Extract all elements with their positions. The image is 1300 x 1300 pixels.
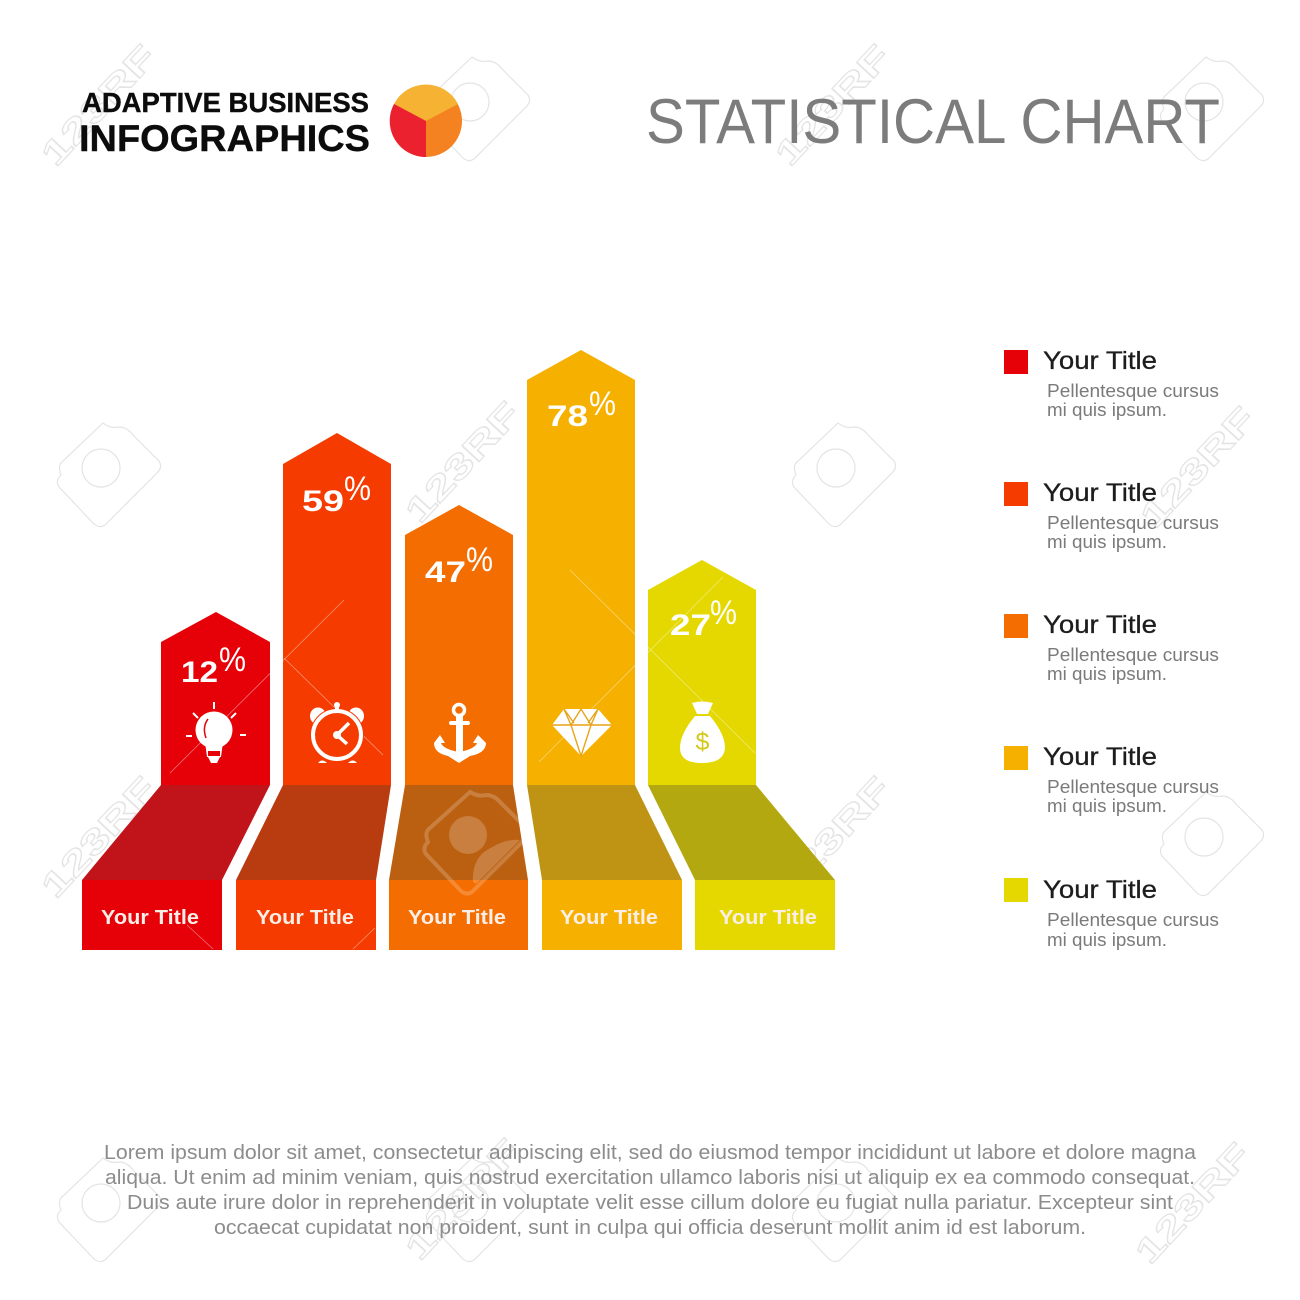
bar 4: [527, 350, 682, 950]
bar 4: Your Title: [560, 907, 658, 929]
legend item 5: [1004, 876, 1219, 950]
legend item 2: Pellentesque cursus: [1047, 513, 1219, 533]
body text: Lorem ipsum dolor sit amet, consectetur adipiscing elit, sed do eiusmod tempor incididunt ut labore et dolore magna: [104, 1141, 1197, 1164]
text: 123RF: [34, 770, 164, 905]
legend item 1: [1004, 347, 1219, 420]
bar 2: [236, 433, 391, 950]
legend item 5: Pellentesque cursus: [1047, 910, 1219, 930]
icon: diamond: [552, 709, 612, 756]
text: 123RF: [768, 770, 898, 905]
bar chart: [82, 350, 835, 950]
icon: alarm clock: [310, 702, 364, 763]
value: 47%: %: [466, 541, 493, 579]
body text: [104, 1141, 1197, 1239]
bar 3: Your Title: [408, 907, 506, 929]
value: 27%: 27: [670, 609, 711, 642]
value: 59%: [302, 470, 371, 518]
icon: logo pie: [390, 84, 462, 157]
legend item 4: [1004, 743, 1219, 816]
value: 78%: 78: [547, 400, 588, 433]
legend item 3: [1004, 611, 1219, 684]
text: 123RF: [34, 38, 164, 173]
body text: occaecat cupidatat non proident, sunt in culpa qui officia deserunt mollit anim id est laborum.: [214, 1216, 1086, 1239]
icon: anchor: [434, 704, 486, 763]
text: 123RF: [398, 395, 528, 530]
body text: Duis aute irure dolor in reprehenderit in voluptate velit esse cillum dolore eu fugiat nulla pariatur. Excepteur sint: [127, 1191, 1173, 1214]
legend item 2: [1004, 479, 1219, 552]
icon: light bulb: [186, 702, 246, 763]
value: 27%: [670, 594, 737, 642]
value: 27%: %: [710, 594, 737, 632]
bar 1: [82, 612, 270, 950]
value: 12%: [181, 641, 246, 689]
logo heading: INFOGRAPHICS: [79, 118, 370, 159]
value: 78%: [547, 385, 616, 433]
bar 2: Your Title: [256, 907, 354, 929]
value: 78%: %: [589, 385, 616, 423]
legend item 4: mi quis ipsum.: [1047, 796, 1167, 816]
legend item 4: Your Title: [1043, 743, 1157, 771]
logo heading: ADAPTIVE BUSINESS: [82, 87, 369, 118]
legend item 1: Pellentesque cursus: [1047, 381, 1219, 401]
value: 47%: [425, 541, 493, 589]
icon: money bag: [680, 702, 725, 763]
text: 123RF: [398, 1132, 528, 1267]
value: 12%: %: [219, 641, 246, 679]
legend item 5: mi quis ipsum.: [1047, 930, 1167, 950]
value: 47%: 47: [425, 556, 466, 589]
legend item 1: Your Title: [1043, 347, 1157, 375]
legend item 3: Pellentesque cursus: [1047, 645, 1219, 665]
value: 59%: %: [344, 470, 371, 508]
icon: money bag: $: [696, 728, 710, 756]
legend item 1: mi quis ipsum.: [1047, 400, 1167, 420]
legend item 3: Your Title: [1043, 611, 1157, 639]
text: 123RF: [768, 38, 898, 173]
value: 59%: 59: [302, 485, 344, 518]
legend item 2: mi quis ipsum.: [1047, 532, 1167, 552]
legend item 3: mi quis ipsum.: [1047, 664, 1167, 684]
logo heading: [79, 87, 370, 159]
bar 5: Your Title: [719, 907, 817, 929]
bar 1: Your Title: [101, 907, 199, 929]
title: STATISTICAL CHART: [646, 87, 1220, 157]
legend: [1004, 347, 1219, 950]
body text: aliqua. Ut enim ad minim veniam, quis nostrud exercitation ullamco laboris nisi ut aliquip ex ea commodo consequat.: [105, 1166, 1195, 1189]
text: 123RF: [1133, 400, 1263, 535]
legend item 4: Pellentesque cursus: [1047, 777, 1219, 797]
text: 123RF: [1128, 1136, 1258, 1271]
value: 12%: 12: [181, 656, 218, 689]
legend item 2: Your Title: [1043, 479, 1157, 507]
bar 5: [648, 560, 835, 950]
legend item 5: Your Title: [1043, 876, 1157, 904]
bar 3: [389, 505, 528, 950]
